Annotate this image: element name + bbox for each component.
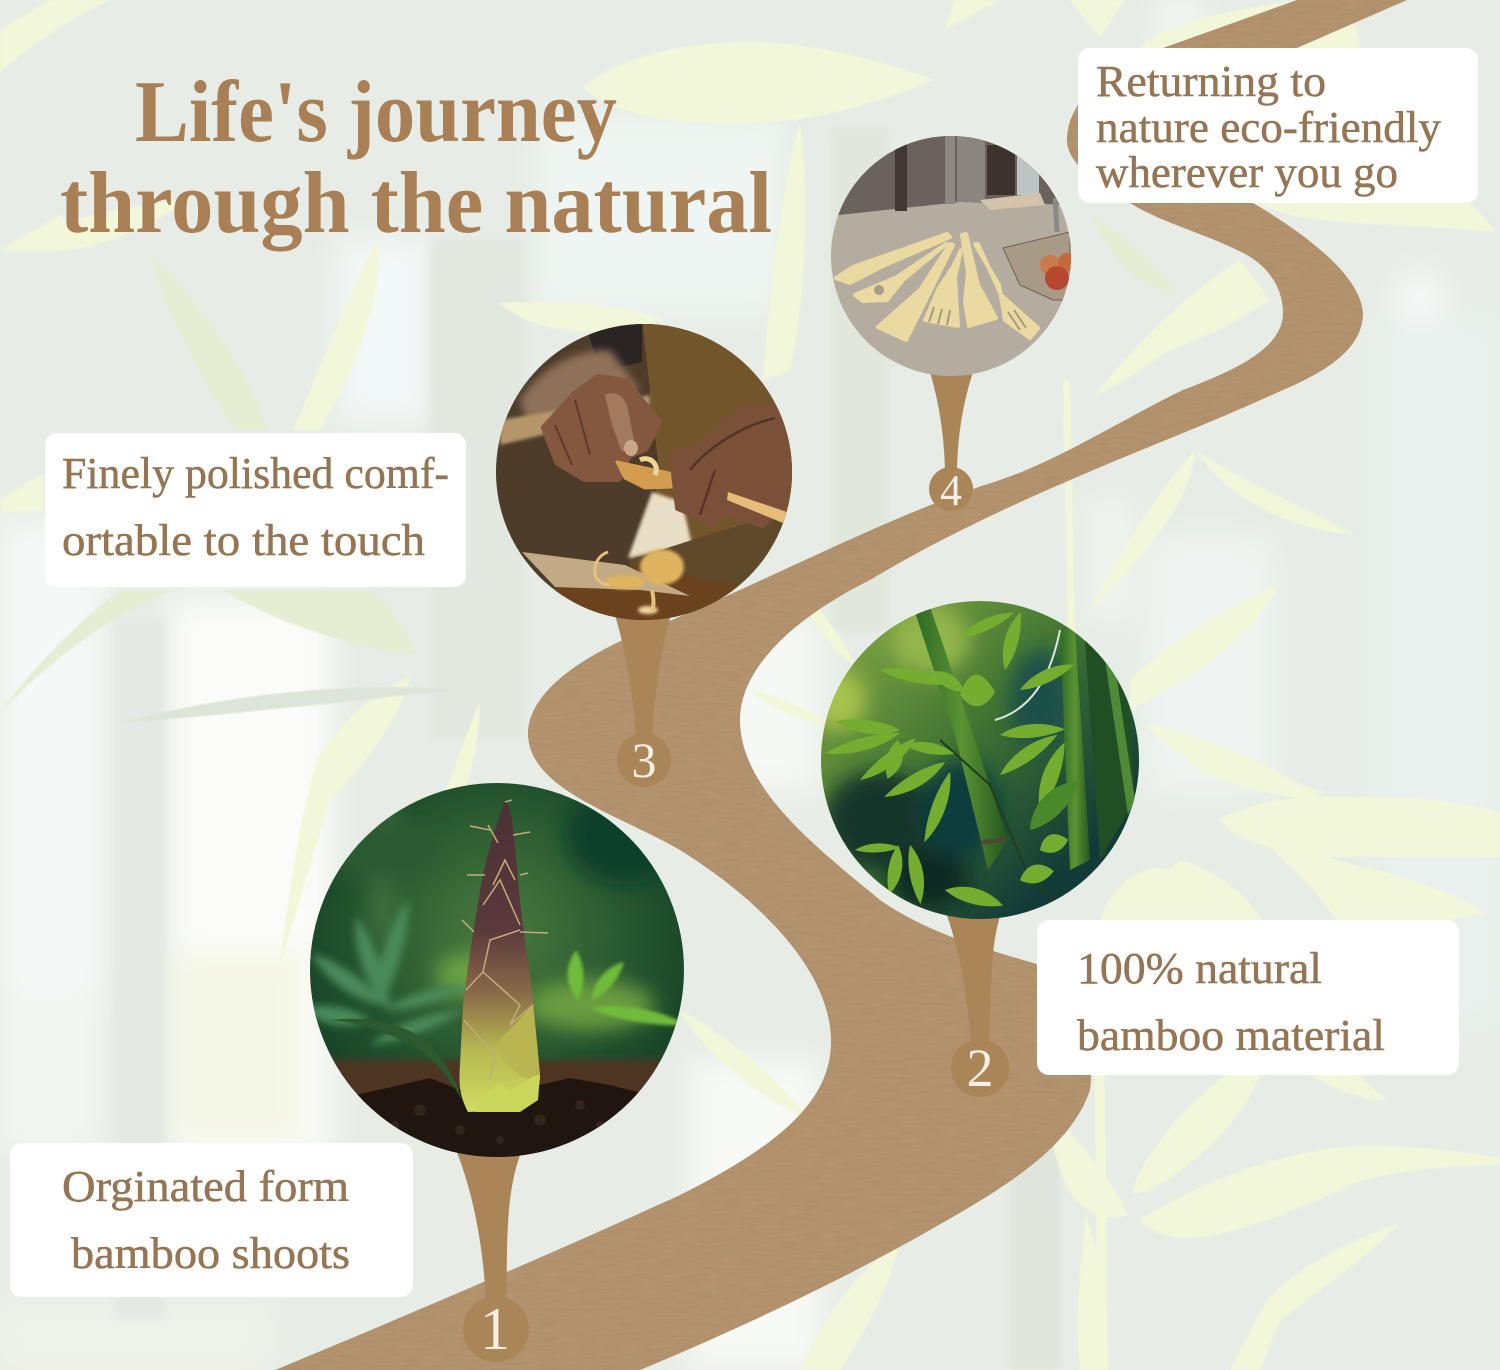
step 4: pin and number	[929, 372, 973, 515]
step 1: pin and number: 1	[480, 1296, 510, 1362]
callout 1	[10, 1143, 413, 1297]
step 1: pin and number	[456, 1150, 529, 1362]
shoot body	[459, 800, 540, 1112]
photo: bamboo shoot	[299, 780, 690, 1170]
winding road	[275, 0, 1407, 1370]
callout 1: bamboo shoots	[71, 1229, 350, 1278]
shavings	[605, 549, 684, 614]
spoon	[617, 462, 678, 488]
step 4: pin and number: 4	[940, 466, 962, 515]
step 2: pin and number	[945, 910, 1009, 1098]
callout 4: Returning to	[1096, 57, 1326, 106]
photo: bamboo plant	[810, 595, 1145, 925]
left hand	[545, 378, 658, 478]
title: Life's journey	[135, 64, 617, 161]
callout 4: wherever you go	[1096, 148, 1398, 197]
callout 4	[1078, 48, 1478, 203]
right hand	[672, 408, 792, 525]
photo: hands carving a spoon	[496, 324, 792, 620]
callout 1: Orginated form	[62, 1162, 349, 1211]
title	[60, 64, 772, 252]
step 3: pin and number	[614, 612, 672, 788]
step 3: pin and number: 3	[632, 732, 656, 788]
utensils	[836, 234, 1038, 340]
basket with fruit	[1003, 232, 1070, 300]
photo: bamboo utensils	[831, 136, 1071, 376]
callout 2	[1037, 920, 1459, 1075]
callout 4: nature eco-friendly	[1096, 103, 1441, 152]
callout 3	[45, 433, 466, 587]
bench	[555, 565, 738, 620]
step 2: pin and number: 2	[966, 1038, 994, 1098]
callout 2: 100% natural	[1077, 944, 1322, 993]
callout 3: Finely polished comf-	[62, 449, 449, 498]
title: through the natural	[60, 155, 772, 252]
callout 2: bamboo material	[1077, 1011, 1385, 1060]
callout 3: ortable to the touch	[62, 516, 425, 565]
